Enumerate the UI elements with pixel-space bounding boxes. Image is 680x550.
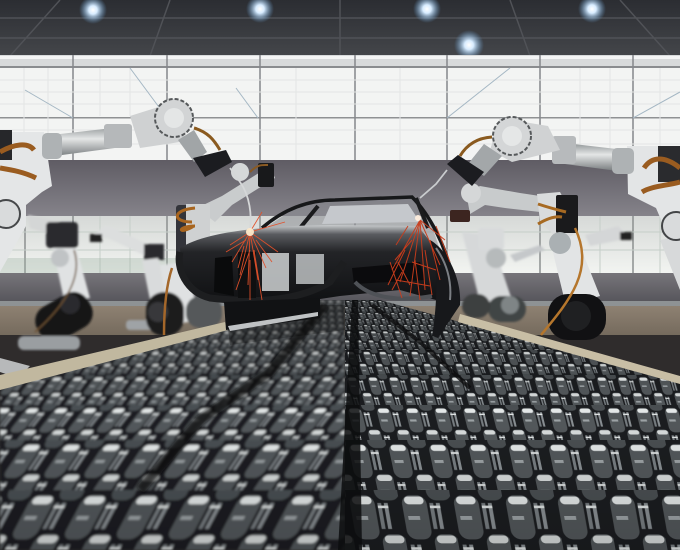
conveyor: dark diagonal lanes	[140, 305, 325, 490]
ceiling	[0, 0, 680, 60]
conveyor belt	[0, 300, 680, 550]
robot arm: weld tip	[420, 170, 447, 198]
conveyor: left half rollers	[0, 300, 345, 550]
welding sparks: right	[388, 215, 450, 300]
robot arm: main limb	[565, 143, 625, 172]
robot: rear left of car	[146, 262, 222, 336]
ceiling lights	[79, 0, 606, 60]
robot: far-left rear	[90, 225, 170, 330]
lower wall and floor	[0, 273, 680, 395]
welding sparks: left	[226, 212, 285, 300]
robot arm: wrist	[178, 130, 207, 162]
robot arm: black weld head	[193, 150, 232, 177]
car body on the line	[179, 197, 460, 338]
welding arm: right big robot	[420, 117, 680, 290]
robot arm: orange cables	[642, 159, 680, 192]
car: door panel	[430, 240, 460, 338]
robot: mid left behind car	[164, 163, 275, 335]
robot arm: black weld head	[447, 155, 484, 186]
car: hood and front body	[180, 225, 458, 302]
lower factory windows	[0, 216, 680, 273]
robot arm: weld tip	[230, 168, 251, 232]
robots: right rear group	[462, 226, 632, 322]
robot: far left	[18, 215, 99, 350]
conveyor: dark centre lane	[338, 300, 362, 550]
robot arm: main limb	[46, 126, 130, 158]
conveyor side rails	[0, 314, 680, 390]
robot arm: elbow joint	[490, 118, 560, 162]
robot arm: base block	[627, 146, 680, 246]
car: windshield and cabin	[268, 198, 450, 280]
car: sill	[224, 298, 320, 330]
welding arm: left big robot	[0, 99, 251, 272]
car: roof outline	[262, 197, 452, 275]
conveyor: right half rollers	[345, 300, 680, 550]
robot arm: elbow joint	[130, 104, 192, 148]
grey wall band	[0, 160, 680, 216]
upper factory windows	[0, 55, 680, 160]
robot arm: base block	[0, 132, 52, 272]
background robots	[18, 215, 632, 350]
robot: mid right behind car	[450, 183, 606, 340]
robot arm: orange cables	[0, 145, 36, 178]
robot arm: wrist	[468, 144, 502, 176]
car: front frame	[179, 252, 344, 301]
